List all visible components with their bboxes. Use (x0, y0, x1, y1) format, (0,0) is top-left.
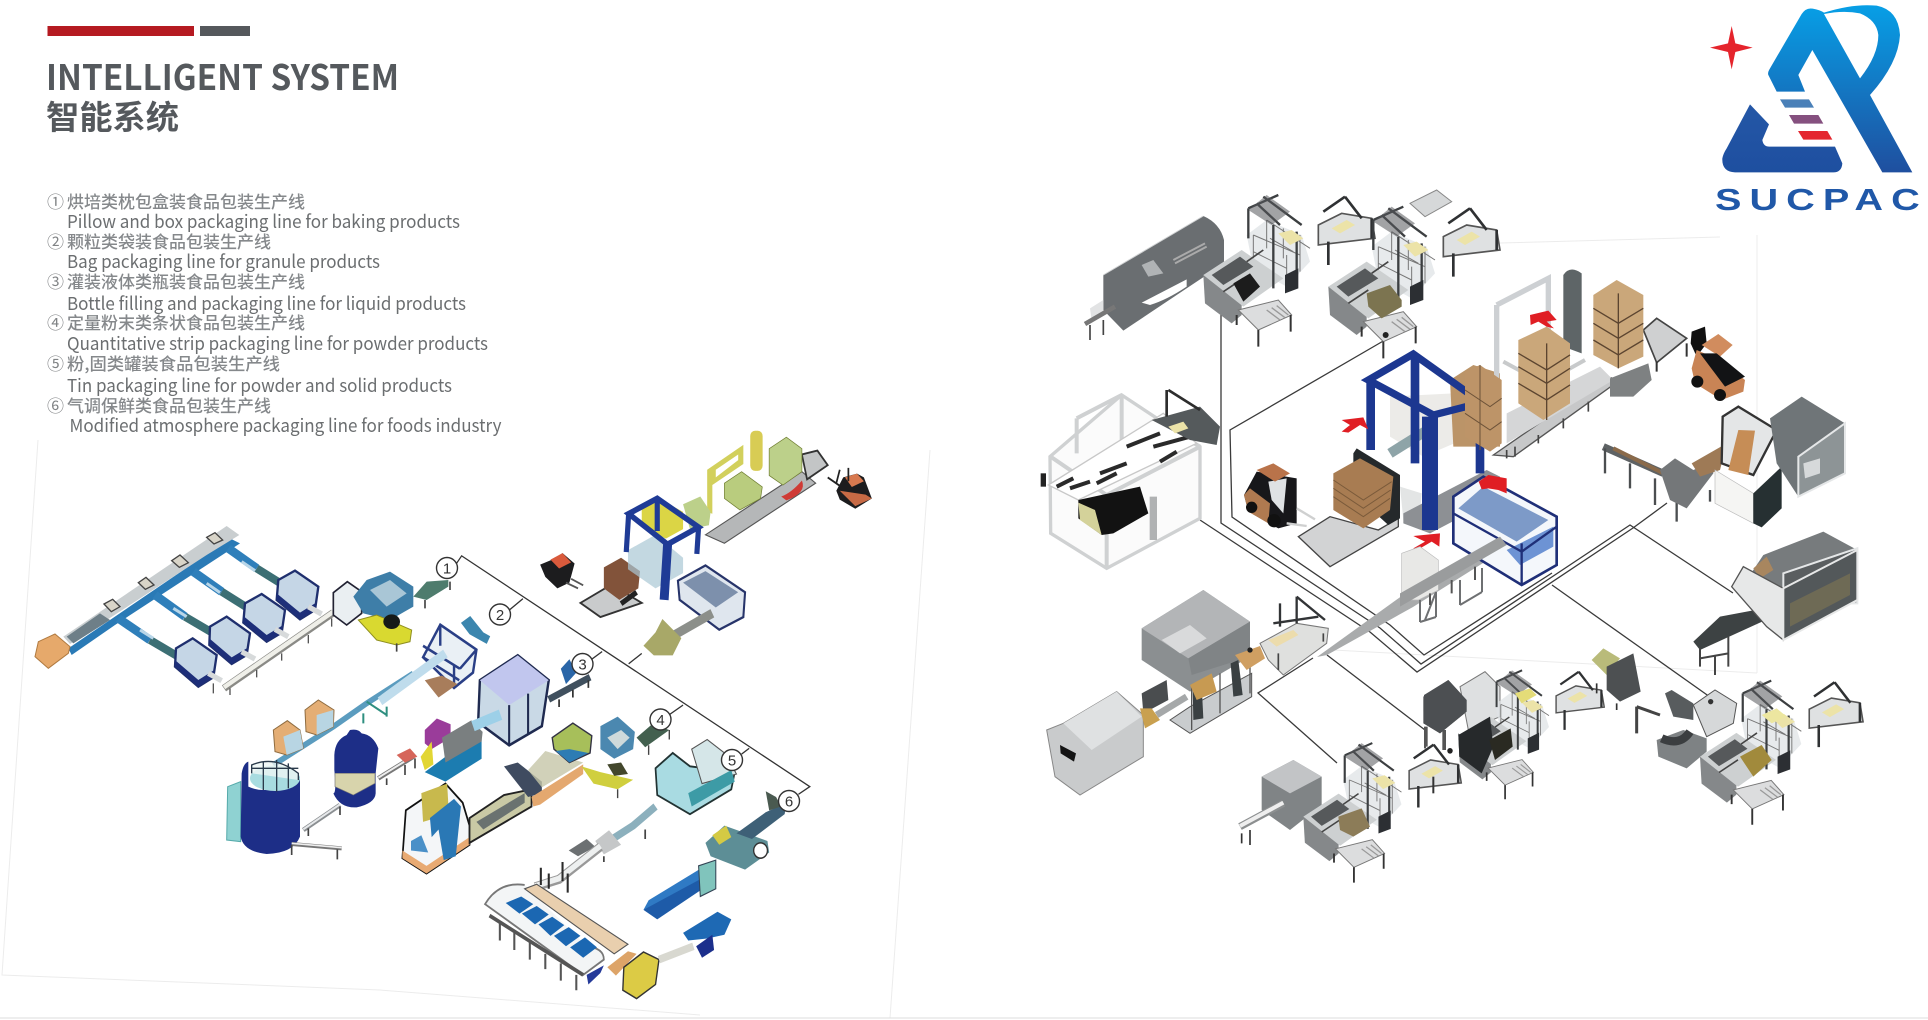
number callouts 1 to 6: 6 (785, 794, 793, 810)
red arrows (1342, 417, 1440, 549)
line 2: bagging (273, 673, 413, 765)
number callouts 1 to 6: 3 (578, 656, 587, 674)
right diagram: central diagonal conveyor (1317, 540, 1507, 657)
upper case erector (1693, 550, 1857, 675)
lower conveyor and gray box machine (1240, 743, 1461, 883)
number callouts 1 to 6: 5 (728, 752, 736, 770)
forklift: right (1691, 327, 1745, 401)
right diagram: connection lines (1200, 312, 1733, 763)
product line list: ④ (47, 309, 64, 334)
dark hooded machine (1423, 672, 1500, 773)
gray tunnel (1085, 216, 1224, 340)
middle station (1592, 648, 1641, 710)
product line list: ② (47, 228, 64, 253)
title: INTELLIGENT SYSTEM (46, 50, 399, 101)
line 5: tin packing (535, 740, 736, 893)
logo: SUCPAC: SUCPAC (1715, 182, 1920, 217)
number callouts 1 to 6: 2 (496, 607, 504, 624)
product line list: Bottle filling and packaging line for liquid products (67, 290, 466, 316)
forklift: center left (1244, 463, 1315, 528)
header accent bars (48, 26, 250, 36)
product line list: Tin packaging line for powder and solid products (67, 372, 452, 398)
product line list: Modified atmosphere packaging line for foods industry (70, 412, 502, 438)
product line list: Pillow and box packaging line for baking products (67, 208, 460, 234)
red arrows (1479, 311, 1557, 493)
logo: SUCPAC (1710, 5, 1920, 217)
navy gantry (1368, 354, 1500, 533)
right diagram: lower machines east (1424, 550, 1863, 825)
packing machine A (1203, 195, 1375, 347)
product line list: Bag packaging line for granule products (67, 248, 380, 274)
product line list: 颗粒类袋装食品包装生产线 (67, 228, 271, 253)
number callouts 1 to 6: 1 (443, 560, 451, 578)
number callouts 1 to 6 (436, 558, 800, 812)
right diagram: lower machines west (1047, 590, 1500, 883)
product line list: 烘培类枕包盒装食品包装生产线 (67, 188, 305, 213)
transfer conveyor (1493, 318, 1687, 458)
product line list: 定量粉末类条状食品包装生产线 (67, 309, 305, 334)
small conveyor station (1260, 597, 1328, 675)
line 3: bottling (421, 655, 590, 782)
right diagram: upper machines (1043, 190, 1500, 568)
product line list: Quantitative strip packaging line for powder products (67, 330, 488, 356)
pallet and infeed conveyor (1298, 448, 1422, 567)
product line list: 粉,固类罐装食品包装生产线 (67, 350, 280, 375)
forklift: red (540, 553, 583, 588)
machine C with dark front (1424, 670, 1604, 799)
line 4: strip packing (402, 717, 669, 873)
case packer (1603, 397, 1845, 527)
right diagram: palletizing end (1400, 270, 1857, 607)
left diagram: lines 2 to 6, palletizing and leader lines (380, 431, 872, 999)
number callouts 1 to 6: 4 (656, 712, 665, 729)
machine D (1700, 681, 1863, 825)
white frame machine (1043, 390, 1220, 568)
line 6: modified atmosphere (643, 791, 786, 919)
infeed machine (1047, 692, 1187, 795)
line 2: product tanks (227, 730, 417, 859)
title (46, 50, 399, 139)
product line list: 气调保鲜类食品包装生产线 (67, 392, 271, 417)
line 5: rotary sorter (485, 884, 731, 999)
left diagram: line 1 and line 2 feed (35, 526, 450, 859)
strapping frame and column (1497, 270, 1585, 400)
product line list: ① (47, 188, 64, 213)
product line list: ⑥ (47, 392, 64, 417)
line 2 gantry (380, 616, 490, 701)
leader lines (456, 556, 810, 794)
pallet stacks (1465, 280, 1643, 452)
shrink tunnel machine (1637, 690, 1737, 768)
product line list: 灌装液体类瓶装食品包装生产线 (67, 268, 305, 293)
title: 智能系统 (46, 91, 179, 139)
product line list: ⑤ (47, 350, 64, 375)
line 1: cartoning cluster (333, 572, 450, 652)
gray hopper enclosure (1142, 590, 1265, 733)
packing machine B (1328, 190, 1500, 358)
cabinet and conveyor head (1400, 537, 1507, 607)
palletizing line (580, 431, 828, 655)
navy frame box (1453, 477, 1557, 585)
faint panel edge lines (0, 235, 1928, 1018)
upper right small machine (1743, 532, 1857, 603)
line 1: branch conveyors and wrappers (118, 548, 333, 695)
forklift: orange (828, 468, 872, 509)
line 1: main blue conveyor (35, 526, 240, 668)
product line list (47, 188, 502, 438)
product line list: ③ (47, 268, 64, 293)
